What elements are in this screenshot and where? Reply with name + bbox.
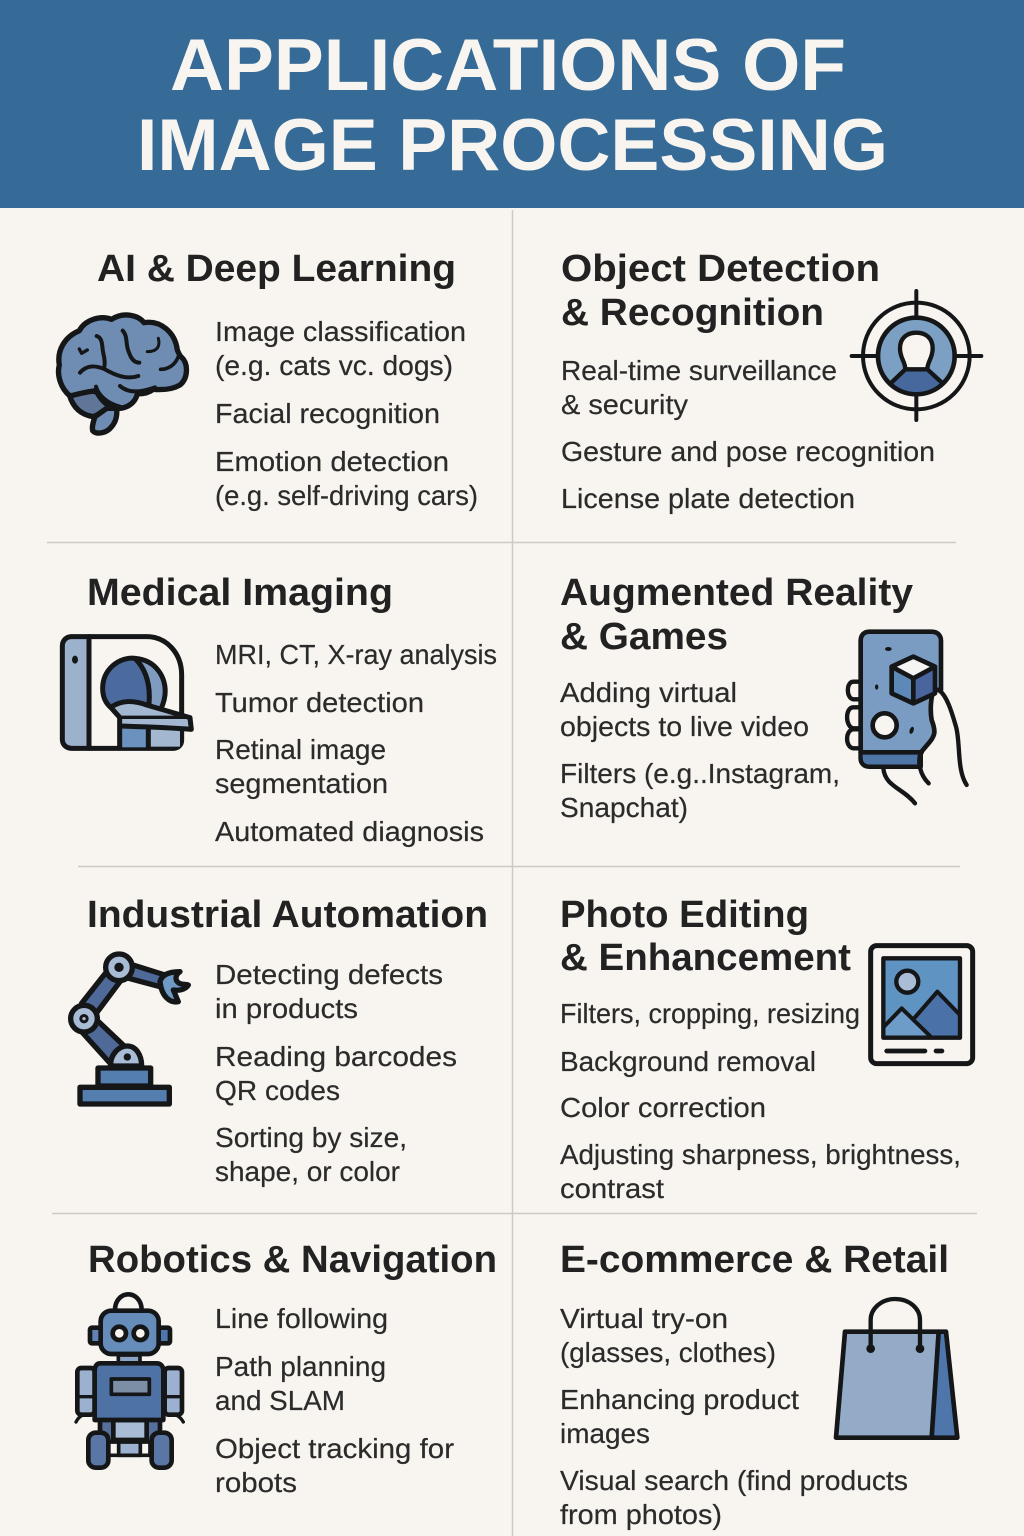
text block: retail uses: Enhancing product (560, 1384, 799, 1415)
text block: medical uses: Automated diagnosis (215, 816, 484, 847)
text block: retail uses: Virtual try-on (560, 1303, 728, 1334)
text block: robotics uses: Line following (215, 1303, 388, 1334)
text block: photo uses: Background removal (560, 1046, 816, 1077)
heading: Medical Imaging: Medical Imaging (87, 572, 393, 614)
text block: AI uses: Emotion detection (215, 446, 449, 477)
header banner (0, 0, 1024, 208)
panel: Object Detection & Recognition (561, 248, 981, 514)
title: APPLICATIONS OF (170, 25, 846, 106)
icon: target with person (852, 291, 981, 420)
heading: Robotics & Navigation: Robotics & Navigation (88, 1239, 497, 1281)
text block: photo uses: Adjusting sharpness, brightness, (560, 1139, 961, 1170)
heading: Object Detection & Recognition (561, 248, 880, 334)
text block: detection uses: License plate detection (561, 483, 855, 514)
text block: AR uses: objects to live video (560, 711, 809, 742)
panel: Photo Editing & Enhancement (560, 894, 973, 1204)
text block: robotics uses (215, 1303, 454, 1498)
text block: AI uses (215, 316, 478, 511)
text block: industrial uses: Reading barcodes (215, 1041, 457, 1072)
heading: Photo Editing & Enhancement: & Enhancement (560, 937, 851, 979)
heading: AI & Deep Learning: AI & Deep Learning (97, 248, 456, 290)
text block: photo uses: Filters, cropping, resizing (560, 998, 860, 1029)
text block: retail uses: (glasses, clothes) (560, 1337, 776, 1368)
text block: medical uses: Tumor detection (215, 687, 424, 718)
text block: AI uses: (e.g. self-driving cars) (215, 480, 478, 511)
icon: robot (76, 1294, 183, 1468)
text block: robotics uses: and SLAM (215, 1385, 345, 1416)
panel: Augmented Reality & Games (560, 572, 967, 823)
text block: robotics uses: Object tracking for (215, 1433, 454, 1464)
heading: E-commerce & Retail: E-commerce & Retail (560, 1239, 949, 1281)
text block: AR uses: Adding virtual (560, 677, 737, 708)
heading: Object Detection & Recognition: & Recognition (561, 292, 824, 334)
text block: AR uses: Filters (e.g..Instagram, (560, 758, 840, 789)
text block: medical uses: segmentation (215, 768, 388, 799)
text block: industrial uses: QR codes (215, 1075, 340, 1106)
text block: photo uses: contrast (560, 1173, 664, 1204)
text block: industrial uses: Detecting defects (215, 959, 443, 990)
text block: detection uses (561, 355, 935, 514)
text block: industrial uses: in products (215, 993, 358, 1024)
text block: AI uses: Image classification (215, 316, 466, 347)
heading: Photo Editing & Enhancement: Photo Editing (560, 894, 809, 936)
heading: Augmented Reality & Games: & Games (560, 616, 728, 658)
text block: AI uses: Facial recognition (215, 398, 440, 429)
icon: robotic arm (71, 954, 188, 1104)
title: IMAGE PROCESSING (137, 105, 888, 186)
text block: industrial uses: shape, or color (215, 1156, 400, 1187)
text block: retail uses: from photos) (560, 1499, 722, 1530)
text block: AR uses: Snapchat) (560, 792, 688, 823)
text block: AR uses (560, 677, 840, 823)
text block: medical uses: Retinal image (215, 734, 386, 765)
text block: AI uses: (e.g. cats vc. dogs) (215, 350, 453, 381)
panel: Medical Imaging (62, 572, 497, 847)
text block: detection uses: Gesture and pose recognition (561, 436, 935, 467)
icon: shopping bag (836, 1299, 957, 1438)
icon: brain (59, 315, 186, 433)
text block: industrial uses (215, 959, 457, 1187)
text block: medical uses (215, 639, 497, 847)
text block: photo uses: Color correction (560, 1092, 766, 1123)
panel: E-commerce & Retail (560, 1239, 957, 1530)
text block: robotics uses: Path planning (215, 1351, 386, 1382)
heading: Photo Editing & Enhancement (560, 894, 851, 979)
icon: MRI scanner (62, 637, 191, 748)
heading: Augmented Reality & Games (560, 572, 913, 658)
text block: detection uses: & security (561, 389, 688, 420)
text block: industrial uses: Sorting by size, (215, 1122, 407, 1153)
heading: Industrial Automation: Industrial Automation (87, 894, 488, 936)
text block: photo uses (560, 998, 961, 1204)
icon: phone with cube (847, 632, 967, 803)
panel: Industrial Automation (71, 894, 488, 1187)
heading: Object Detection & Recognition: Object Detection (561, 248, 880, 290)
text block: detection uses: Real-time surveillance (561, 355, 837, 386)
icon: framed picture (871, 946, 973, 1064)
text block: retail uses (560, 1303, 908, 1530)
panel: AI & Deep Learning (59, 248, 478, 511)
text block: medical uses: MRI, CT, X-ray analysis (215, 639, 497, 670)
panel: Robotics & Navigation (76, 1239, 497, 1498)
title (137, 25, 888, 186)
heading: Augmented Reality & Games: Augmented Reality (560, 572, 913, 614)
text block: robotics uses: robots (215, 1467, 297, 1498)
text block: retail uses: Visual search (find products (560, 1465, 908, 1496)
text block: retail uses: images (560, 1418, 650, 1449)
